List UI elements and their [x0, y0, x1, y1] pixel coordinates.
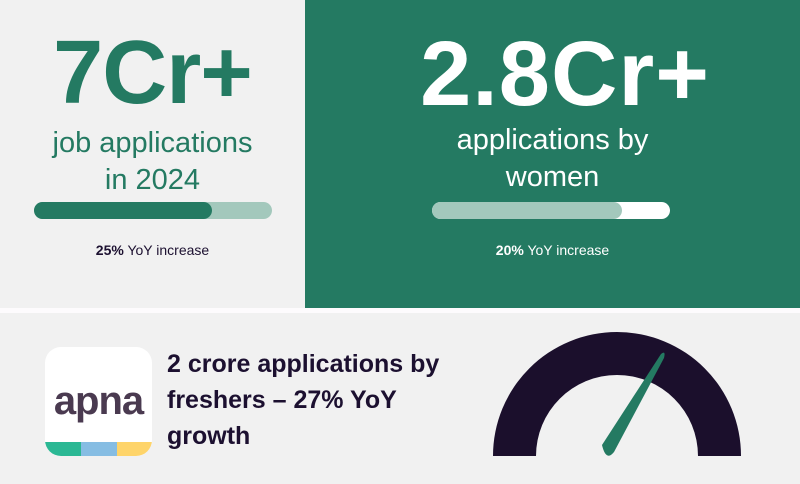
heading: 2.8Cr+: 2.8Cr+ [420, 23, 710, 125]
text: freshers applications: 2 crore applications by freshers – 27% YoY growth [167, 350, 439, 450]
needle [602, 353, 665, 456]
text: 25% YoY increase: 25% YoY increase [96, 242, 209, 258]
progress bar: 25% [34, 202, 272, 219]
icon: apna logo: apna [54, 379, 143, 423]
panel: total applications [0, 0, 305, 308]
progress bar: 20% [432, 202, 670, 219]
panel: women applications [305, 0, 800, 308]
text: job applications in 2024 [52, 127, 252, 196]
chart: gauge [493, 332, 741, 456]
text: job applications in 2024: job applications [53, 127, 252, 159]
heading: 7Cr+: 7Cr+ [53, 23, 252, 123]
text: applications by women [457, 124, 648, 193]
text: 20% YoY increase: 20% YoY increase [496, 242, 609, 258]
text: applications by women: applications by [457, 124, 648, 156]
text: job applications in 2024: in 2024 [105, 164, 200, 196]
text: applications by women: women [506, 161, 599, 193]
icon: apna logo [45, 347, 152, 456]
